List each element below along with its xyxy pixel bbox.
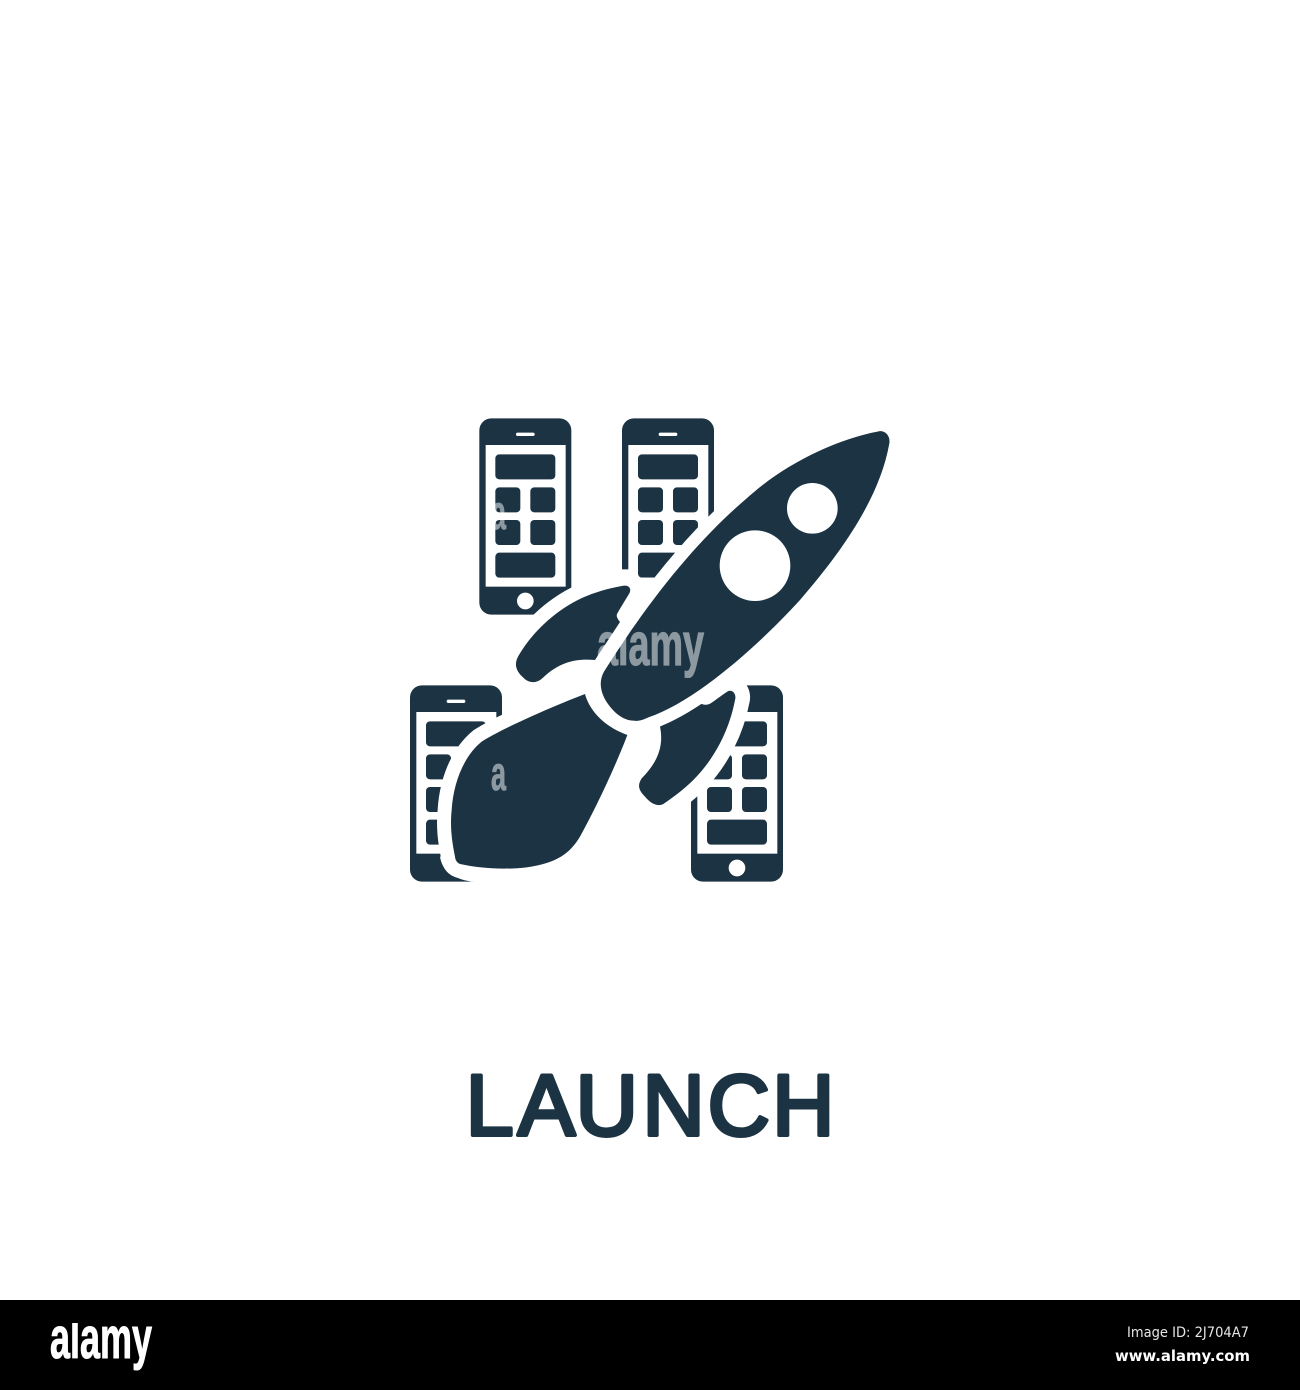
icon: small porthole xyxy=(787,483,838,534)
icon: top right phone xyxy=(622,418,714,615)
footer logo: alamy: alamy xyxy=(50,1306,152,1371)
icon: bottom left phone xyxy=(410,685,502,882)
footer text: website: www.alamy.com xyxy=(1115,1347,1250,1365)
icon: top left phone xyxy=(479,418,571,615)
icon: rocket lower fin xyxy=(639,691,735,805)
footer bar xyxy=(0,1300,1300,1390)
icon: rocket flame xyxy=(451,694,627,869)
icon: rocket launching over four phones xyxy=(410,418,890,885)
title: LAUNCH: LAUNCH xyxy=(466,1058,834,1154)
icon: large porthole xyxy=(720,530,790,601)
icon: rocket body with two portholes xyxy=(601,431,890,721)
icon: rocket upper fin xyxy=(516,586,630,682)
watermark: small a on flame: a xyxy=(491,748,506,801)
watermark: alamy centre: alamy xyxy=(597,611,704,678)
footer text: image ID: Image ID: 2J704A7 xyxy=(1127,1325,1249,1341)
icon: bottom right phone xyxy=(691,685,783,882)
watermark: small a on phone: a xyxy=(491,487,506,540)
